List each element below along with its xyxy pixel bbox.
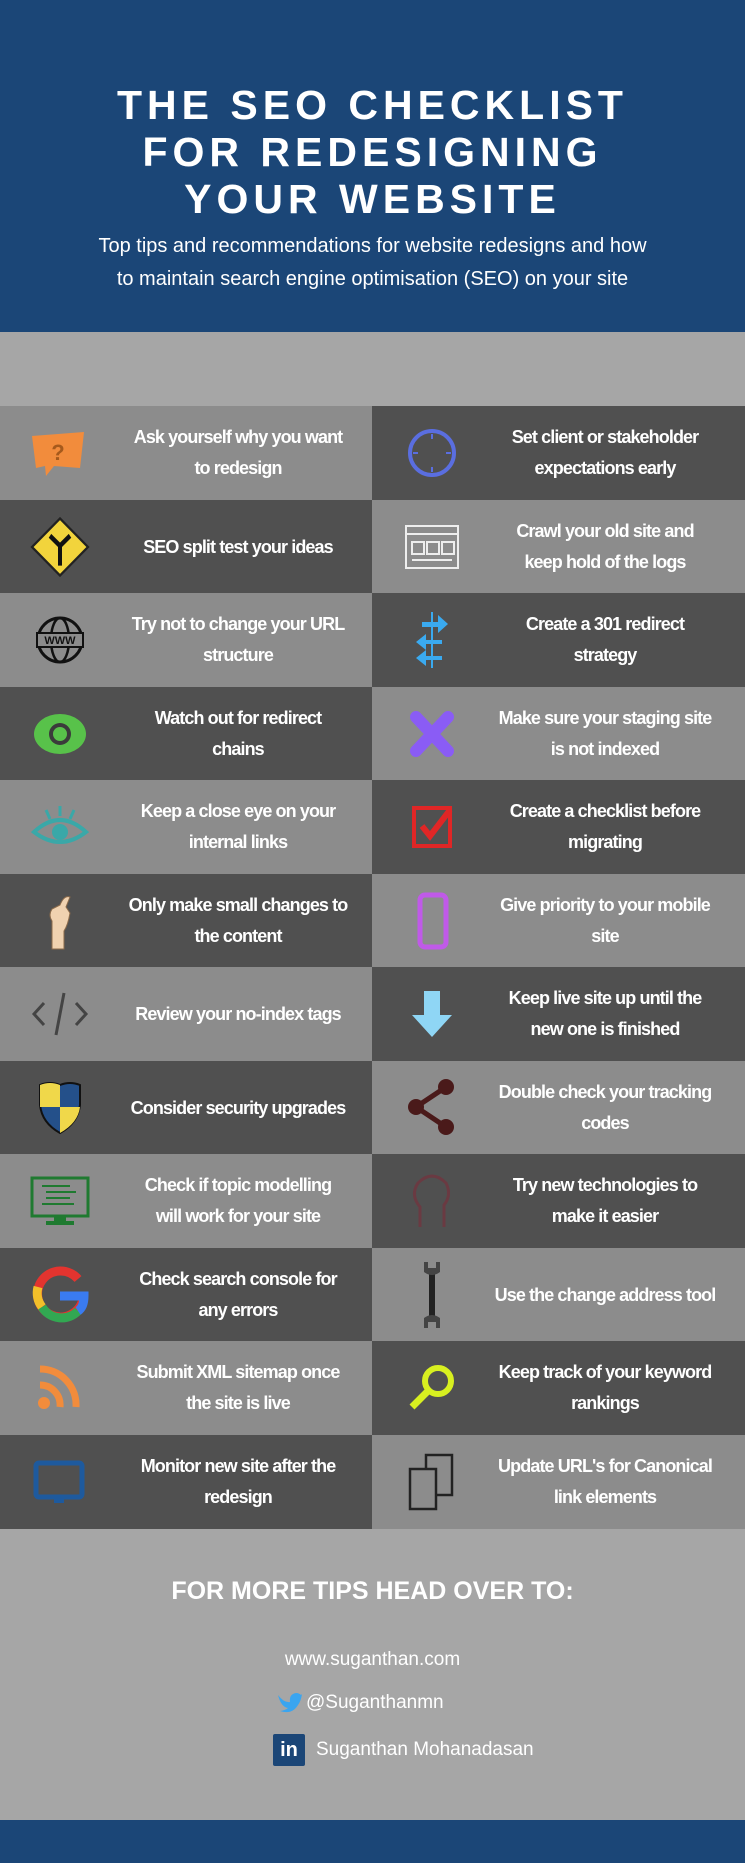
title: THE SEO CHECKLIST	[117, 82, 628, 128]
text: to redesign	[194, 458, 282, 478]
row 11 left	[0, 1341, 373, 1435]
text: the content	[194, 926, 282, 946]
row 8 left	[0, 1061, 373, 1155]
text: Create a 301 redirect	[526, 614, 684, 634]
text	[154, 708, 322, 759]
text: Monitor new site after the	[141, 1456, 335, 1476]
icon: down arrow	[412, 991, 452, 1037]
row 3 right	[372, 593, 745, 687]
text	[141, 801, 336, 852]
icon: www globe: WWW	[44, 635, 76, 647]
text	[106, 1435, 370, 1529]
text: Ask yourself why you want	[134, 427, 342, 447]
icon: monitor	[30, 1457, 90, 1507]
row 10 right	[372, 1248, 745, 1342]
text	[470, 1341, 740, 1435]
text: chains	[212, 739, 264, 759]
row 12 left	[0, 1435, 373, 1529]
row 7 left	[0, 967, 373, 1061]
icon: rss	[38, 1366, 80, 1409]
text: migrating	[568, 832, 642, 852]
text: the site is live	[186, 1393, 290, 1413]
footer	[0, 1529, 745, 1820]
row 4 right	[372, 687, 745, 781]
text: Keep live site up until the	[509, 988, 701, 1008]
icon: code tag	[32, 992, 88, 1036]
row 10 left	[0, 1248, 373, 1342]
text	[512, 427, 699, 478]
text	[139, 1269, 338, 1320]
text: Create a checklist before	[510, 801, 700, 821]
text	[499, 1082, 712, 1133]
subtitle	[98, 235, 647, 290]
icon: phone	[418, 892, 448, 950]
text: structure	[203, 645, 273, 665]
text	[134, 427, 343, 478]
icon: linkedin	[273, 1734, 305, 1766]
row 6 left	[0, 874, 373, 968]
text: Set client or stakeholder	[512, 427, 698, 447]
header	[0, 0, 745, 332]
icon: teal eye	[31, 806, 89, 844]
website: www.suganthan.com	[285, 1649, 460, 1670]
text	[526, 614, 685, 665]
twitter: @Suganthanmn	[306, 1692, 444, 1713]
subtitle: Top tips and recommendations for website redesigns and how	[98, 235, 647, 257]
icon: www globe	[36, 616, 84, 664]
text: Keep track of your keyword	[499, 1362, 711, 1382]
row 2 right	[372, 500, 745, 594]
footer heading: FOR MORE TIPS HEAD OVER TO:	[171, 1577, 574, 1605]
title	[117, 82, 628, 222]
text: link elements	[554, 1487, 656, 1507]
icon: redirect arrows	[416, 612, 448, 668]
bottom bar	[0, 1820, 745, 1863]
text	[513, 1175, 698, 1226]
text: internal links	[189, 832, 287, 852]
text: Try new technologies to	[513, 1175, 697, 1195]
icon: wrench	[424, 1262, 440, 1328]
icon: question speech	[32, 432, 84, 476]
row 2 left	[0, 500, 373, 594]
text: make it easier	[552, 1206, 658, 1226]
icon: copy squares	[402, 1451, 462, 1513]
text: Use the change address tool	[495, 1284, 715, 1304]
row 8 right	[372, 1061, 745, 1155]
icon: browser wireframe	[405, 525, 459, 569]
text	[145, 1175, 331, 1226]
text: Keep a close eye on your	[141, 801, 335, 821]
text: strategy	[574, 645, 636, 665]
text: redesign	[204, 1487, 272, 1507]
text: site	[591, 926, 619, 946]
text: Double check your tracking	[499, 1082, 711, 1102]
text: codes	[581, 1113, 629, 1133]
text: Only make small changes to	[129, 895, 347, 915]
row 7 right	[372, 967, 745, 1061]
icon: twitter bird	[276, 1691, 302, 1715]
text	[510, 801, 700, 852]
text: new one is finished	[531, 1019, 679, 1039]
row 5 left	[0, 780, 373, 874]
row 4 left	[0, 687, 373, 781]
text: Consider security upgrades	[131, 1098, 345, 1118]
text: Check search console for	[139, 1269, 337, 1289]
row 11 right	[372, 1341, 745, 1435]
text	[500, 895, 710, 946]
icon: share	[408, 1079, 454, 1135]
icon: monitor code	[30, 1176, 90, 1225]
text	[470, 1435, 740, 1529]
text: is not indexed	[551, 739, 659, 759]
row 1 right	[372, 406, 745, 500]
title: YOUR WEBSITE	[184, 176, 561, 222]
text	[136, 1362, 340, 1413]
icon: magnifier	[402, 1363, 462, 1413]
text: Give priority to your mobile	[500, 895, 710, 915]
twitter	[276, 1689, 476, 1717]
text	[499, 708, 712, 759]
row 1 left	[0, 406, 373, 500]
text: expectations early	[535, 458, 675, 478]
text: Review your no-index tags	[135, 1004, 341, 1024]
icon: hand	[50, 896, 70, 950]
text	[129, 895, 348, 946]
title: FOR REDESIGNING	[142, 129, 602, 175]
text	[132, 614, 345, 665]
text: Update URL's for Canonical	[498, 1456, 712, 1476]
icon: question speech: ?	[51, 440, 65, 465]
icon: green eye	[34, 714, 86, 754]
icon: google G	[32, 1266, 88, 1322]
text: Watch out for redirect	[155, 708, 321, 728]
icon: clock	[408, 429, 456, 477]
text: SEO split test your ideas	[143, 536, 333, 556]
icon: shield	[39, 1082, 81, 1134]
row 5 right	[372, 780, 745, 874]
linkedin	[273, 1734, 593, 1766]
row 9 right	[372, 1154, 745, 1248]
row 6 right	[372, 874, 745, 968]
row 12 right	[372, 1435, 745, 1529]
text	[516, 521, 694, 572]
text: Make sure your staging site	[499, 708, 711, 728]
text: will work for your site	[156, 1206, 320, 1226]
subtitle: to maintain search engine optimisation (SEO) on your site	[117, 268, 628, 290]
text: keep hold of the logs	[524, 552, 686, 572]
row 3 left	[0, 593, 373, 687]
text: any errors	[198, 1300, 278, 1320]
text: rankings	[571, 1393, 639, 1413]
icon: head (faint)	[413, 1174, 450, 1227]
text: Crawl your old site and	[516, 521, 694, 541]
row 9 left	[0, 1154, 373, 1248]
linkedin: Suganthan Mohanadasan	[316, 1739, 534, 1760]
icon: checkbox	[412, 806, 452, 848]
text: Submit XML sitemap once	[136, 1362, 340, 1382]
icon: road sign	[30, 517, 90, 577]
text: Check if topic modelling	[145, 1175, 331, 1195]
text: Try not to change your URL	[132, 614, 344, 634]
text	[509, 988, 702, 1039]
icon: linkedin: in	[280, 1739, 298, 1761]
icon: purple X	[410, 711, 454, 757]
